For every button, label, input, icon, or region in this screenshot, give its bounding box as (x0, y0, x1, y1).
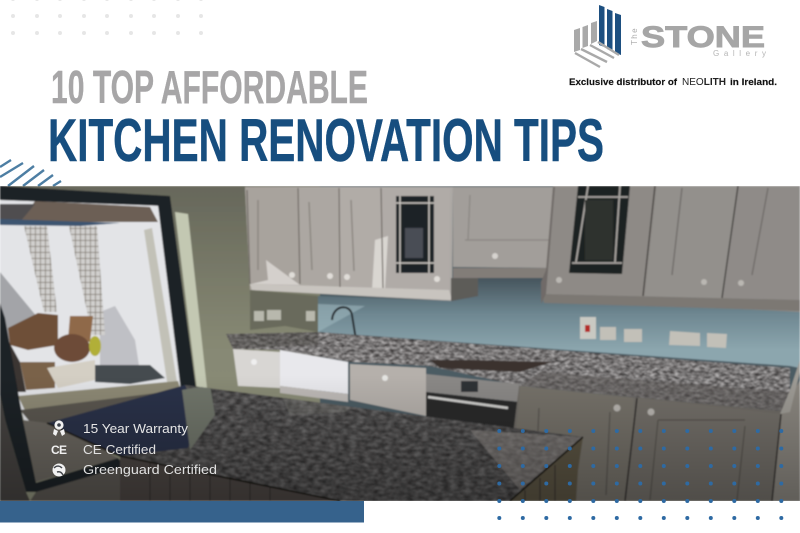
oven (426, 374, 519, 432)
certification list (51, 420, 217, 477)
trellis panels (24, 226, 57, 312)
distributor tagline: Exclusive distributor of (569, 77, 678, 88)
kitchen photo (0, 186, 800, 505)
warranty label: 15 Year Warranty (83, 422, 189, 436)
door edges (247, 188, 383, 288)
logo word: The: The (630, 27, 639, 45)
leaded glass door left (396, 196, 434, 273)
granite worktop (226, 331, 791, 412)
CE label: CE Certified (83, 443, 156, 457)
door frame (0, 186, 196, 492)
garden view through door (0, 198, 186, 456)
icon: award ribbon (53, 420, 65, 436)
title line one: 10 TOP AFFORDABLE (51, 61, 368, 113)
greenguard label: Greenguard Certified (83, 463, 217, 477)
leaded glass door right (569, 186, 630, 274)
icon: CE mark: CE (51, 443, 67, 457)
upper cabinet centre (451, 187, 553, 301)
island granite top (40, 380, 590, 505)
floor (23, 420, 118, 482)
handles (289, 272, 295, 278)
logo icon: stone bars (574, 5, 621, 67)
logo word: STONE: STONE (641, 21, 765, 54)
distributor tagline (569, 77, 777, 88)
decorative dot grid top left (11, 0, 203, 35)
island edge (47, 423, 583, 501)
bottom shading overlay (0, 390, 800, 501)
icon: greenguard globe (52, 464, 66, 476)
island panelling (120, 437, 583, 501)
decorative dot grid bottom right (497, 429, 783, 520)
diagonal stripes accent (0, 160, 61, 186)
blue footer bar (0, 501, 364, 522)
wall sockets (254, 310, 727, 348)
neolith wordmark: NEOLITH (682, 77, 726, 88)
wall light strip (175, 212, 207, 389)
logo: The Stone Gallery (574, 5, 766, 67)
tap (332, 307, 356, 340)
handles (556, 277, 562, 283)
garden furniture (8, 313, 58, 350)
paving (18, 380, 180, 410)
upper wall cabinets left group (245, 187, 453, 301)
photo base (319, 186, 800, 418)
side wall (0, 186, 320, 501)
lower cabinets and sink (233, 349, 426, 416)
splashback (318, 288, 800, 368)
logo word: Gallery: Gallery (713, 49, 766, 58)
distributor tagline: in Ireland. (730, 77, 777, 88)
terrace floor (20, 393, 153, 455)
lower right cabinets (505, 360, 800, 501)
upper cabinets right group (541, 186, 800, 312)
